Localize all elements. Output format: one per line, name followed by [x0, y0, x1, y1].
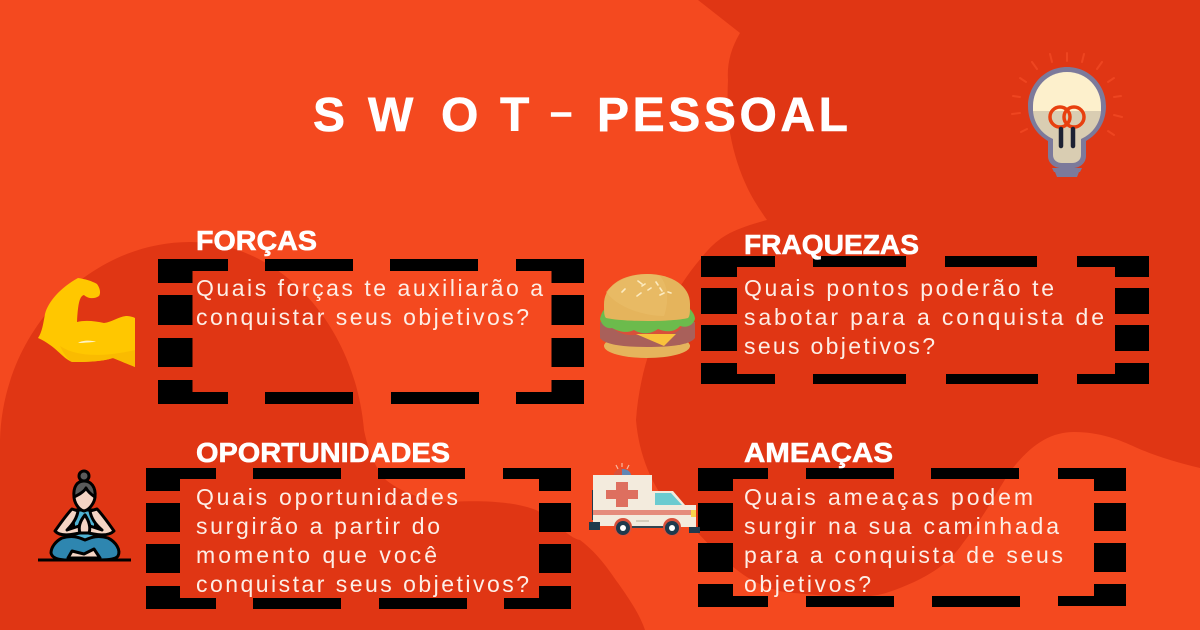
frame: ameaças: [698, 468, 1126, 607]
panel: fraquezas: [600, 229, 1149, 384]
title: T: [500, 89, 529, 142]
text: oportunidades: [196, 484, 529, 597]
frame: oportunidades: [146, 468, 571, 609]
text: oportunidades: Quais oportunidades: [196, 484, 458, 510]
heading: forças: FORÇAS: [196, 225, 317, 256]
panel: forças: [38, 225, 584, 404]
text: forças: [196, 275, 543, 330]
text: oportunidades: momento que você: [196, 542, 437, 568]
text: oportunidades: conquistar seus objetivos?: [196, 571, 529, 597]
title: O: [441, 89, 478, 142]
heading: ameaças: AMEAÇAS: [744, 437, 893, 468]
title: W: [368, 89, 414, 142]
text: fraquezas: [744, 275, 1104, 359]
title: –: [550, 90, 572, 134]
frame: fraquezas: [701, 256, 1149, 384]
text: forças: Quais forças te auxiliarão a: [196, 275, 543, 301]
title: S: [313, 89, 345, 142]
text: ameaças: surgir na sua caminhada: [744, 513, 1059, 539]
icon: hamburger: [600, 274, 695, 358]
icon: meditating woman: [38, 471, 131, 560]
panel: ameaças: [589, 437, 1126, 607]
text: ameaças: objetivos?: [744, 571, 871, 597]
icon: light bulb: [1012, 53, 1122, 177]
text: ameaças: para a conquista de seus: [744, 542, 1063, 568]
text: fraquezas: seus objetivos?: [744, 333, 935, 359]
text: ameaças: [744, 484, 1063, 597]
text: fraquezas: sabotar para a conquista de: [744, 304, 1104, 330]
icon: flexed arm: [38, 278, 135, 367]
heading: oportunidades: OPORTUNIDADES: [196, 437, 450, 468]
icon: ambulance: [589, 463, 700, 536]
heading: fraquezas: FRAQUEZAS: [744, 229, 919, 260]
text: fraquezas: Quais pontos poderão te: [744, 275, 1054, 301]
frame: forças: [158, 259, 584, 404]
panel: oportunidades: [38, 437, 571, 609]
title: PESSOAL: [597, 89, 852, 142]
text: ameaças: Quais ameaças podem: [744, 484, 1033, 510]
text: forças: conquistar seus objetivos?: [196, 304, 529, 330]
text: oportunidades: surgirão a partir do: [196, 513, 440, 539]
